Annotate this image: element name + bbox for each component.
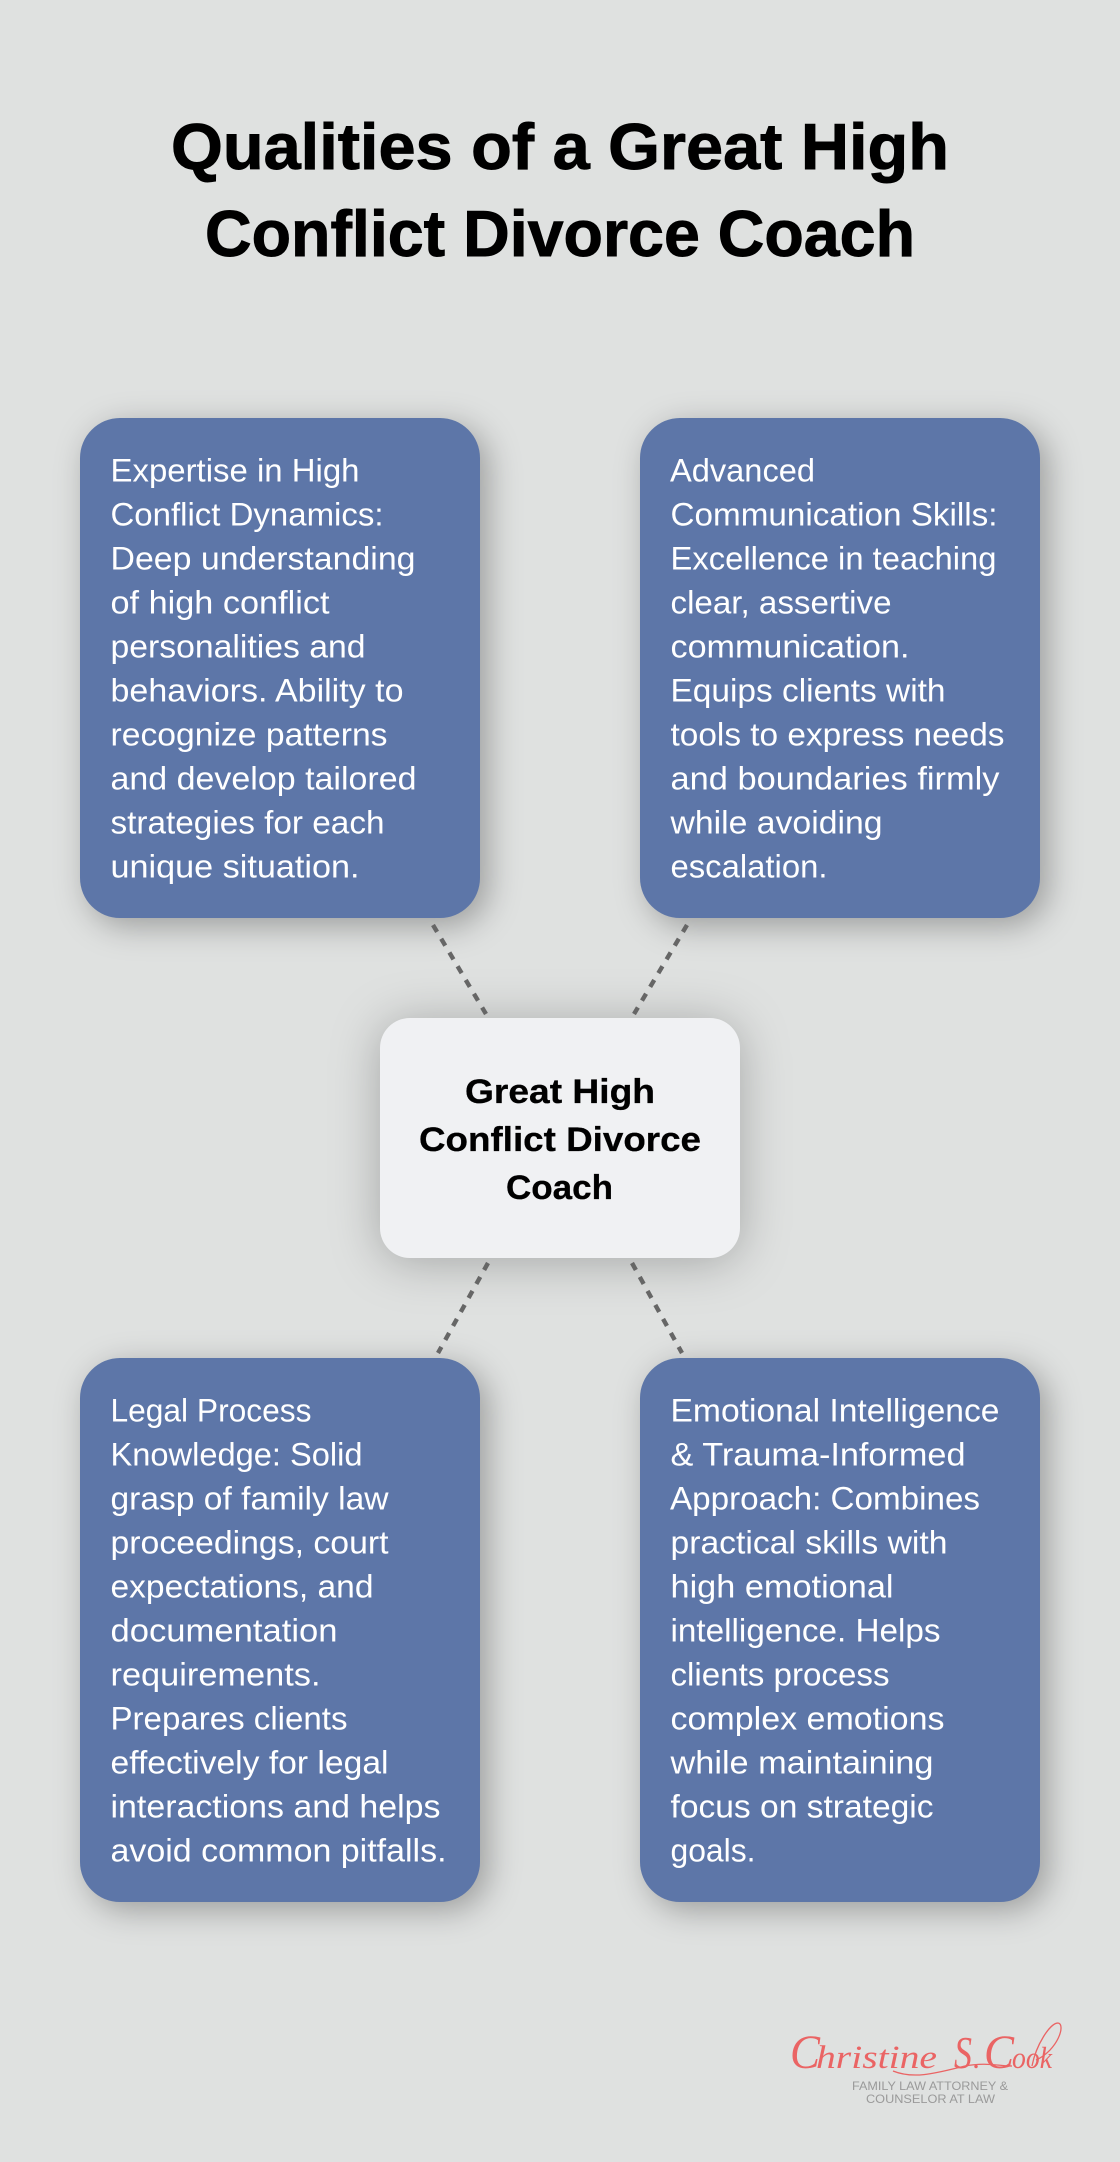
connector: top left card to center <box>433 925 486 1014</box>
panel: expertise in high conflict dynamics: and develop tailored <box>110 761 416 797</box>
panel: emotional intelligence and trauma-informed approach: practical skills with <box>670 1525 948 1561</box>
panel: expertise in high conflict dynamics: unique situation. <box>110 849 360 885</box>
panel: legal process knowledge: effectively for legal <box>110 1745 388 1781</box>
panel: emotional intelligence and trauma-informed approach: goals. <box>670 1833 756 1869</box>
panel: emotional intelligence and trauma-informed approach: & Trauma-Informed <box>670 1437 966 1473</box>
logo: Christine S. Cook: C <box>790 2026 821 2079</box>
panel: advanced communication skills: Communication Skills: <box>670 497 998 533</box>
panel: emotional intelligence and trauma-informed approach: clients process <box>670 1657 890 1693</box>
panel: legal process knowledge: avoid common pitfalls. <box>110 1833 446 1869</box>
panel: legal process knowledge: expectations, and <box>110 1569 374 1605</box>
panel: legal process knowledge: Prepares clients <box>110 1701 348 1737</box>
panel: advanced communication skills: Advanced <box>670 453 815 489</box>
logo: Christine S. Cook: . <box>973 2042 980 2075</box>
panel: expertise in high conflict dynamics: Conflict Dynamics: <box>110 497 384 533</box>
panel: emotional intelligence and trauma-informed approach: complex emotions <box>670 1701 944 1737</box>
center node: great high conflict divorce coach: Conflict Divorce <box>419 1121 701 1159</box>
panel: emotional intelligence and trauma-informed approach: Approach: Combines <box>670 1481 980 1517</box>
panel: advanced communication skills: escalation. <box>670 849 828 885</box>
logo: Christine S. Cook: C <box>984 2026 1015 2079</box>
connector: bottom left card to center <box>438 1263 488 1353</box>
title: Qualities of a Great High <box>171 110 949 183</box>
panel: emotional intelligence and trauma-informed approach: high emotional <box>670 1569 894 1605</box>
panel: legal process knowledge: interactions and helps <box>110 1789 440 1825</box>
panel: emotional intelligence and trauma-informed approach: focus on strategic <box>670 1789 934 1825</box>
panel: advanced communication skills: and boundaries firmly <box>670 761 1000 797</box>
panel: emotional intelligence and trauma-informed approach: while maintaining <box>669 1745 934 1781</box>
connector: top right card to center <box>634 925 687 1014</box>
panel: legal process knowledge: Legal Process <box>110 1393 312 1429</box>
center node: great high conflict divorce coach: Great High <box>465 1073 655 1111</box>
panel: advanced communication skills <box>640 418 1040 918</box>
panel: emotional intelligence and trauma-informed approach: Emotional Intelligence <box>670 1393 1000 1429</box>
panel: expertise in high conflict dynamics: of high conflict <box>110 585 330 621</box>
logo: Christine S. Cook: S <box>954 2027 972 2078</box>
panel: legal process knowledge: Knowledge: Solid <box>110 1437 362 1473</box>
panel: advanced communication skills: Excellence in teaching <box>670 541 996 577</box>
panel: expertise in high conflict dynamics: strategies for each <box>110 805 384 841</box>
title <box>171 110 949 270</box>
panel: legal process knowledge <box>80 1358 480 1902</box>
panel: emotional intelligence and trauma-informed approach <box>640 1358 1040 1902</box>
center node: great high conflict divorce coach: Coach <box>506 1169 613 1207</box>
panel: expertise in high conflict dynamics: recognize patterns <box>110 717 388 753</box>
panel: advanced communication skills: Equips clients with <box>670 673 946 709</box>
panel: advanced communication skills: tools to express needs <box>670 717 1004 753</box>
center node: great high conflict divorce coach <box>380 1018 740 1258</box>
logo: Christine S. Cook: COUNSELOR AT LAW <box>866 2094 995 2106</box>
panel: expertise in high conflict dynamics: behaviors. Ability to <box>110 673 404 709</box>
logo: Christine S. Cook: ook <box>1012 2040 1053 2075</box>
panel: expertise in high conflict dynamics <box>80 418 480 918</box>
logo: Christine S. Cook: hristine <box>816 2040 937 2076</box>
panel: legal process knowledge: proceedings, court <box>110 1525 389 1561</box>
panel: legal process knowledge: grasp of family law <box>110 1481 389 1517</box>
panel: advanced communication skills: clear, assertive <box>670 585 892 621</box>
panel: advanced communication skills: communication. <box>670 629 910 665</box>
logo: Christine S. Cook <box>790 2023 1061 2106</box>
title: Conflict Divorce Coach <box>205 197 915 270</box>
logo: Christine S. Cook: FAMILY LAW ATTORNEY & <box>852 2081 1008 2093</box>
panel: expertise in high conflict dynamics: personalities and <box>110 629 366 665</box>
panel: expertise in high conflict dynamics: Deep understanding <box>110 541 416 577</box>
panel: legal process knowledge: documentation <box>110 1613 338 1649</box>
panel: legal process knowledge: requirements. <box>110 1657 320 1693</box>
connector: bottom right card to center <box>632 1263 682 1353</box>
panel: expertise in high conflict dynamics: Expertise in High <box>110 453 360 489</box>
panel: advanced communication skills: while avoiding <box>669 805 882 841</box>
panel: emotional intelligence and trauma-informed approach: intelligence. Helps <box>670 1613 940 1649</box>
